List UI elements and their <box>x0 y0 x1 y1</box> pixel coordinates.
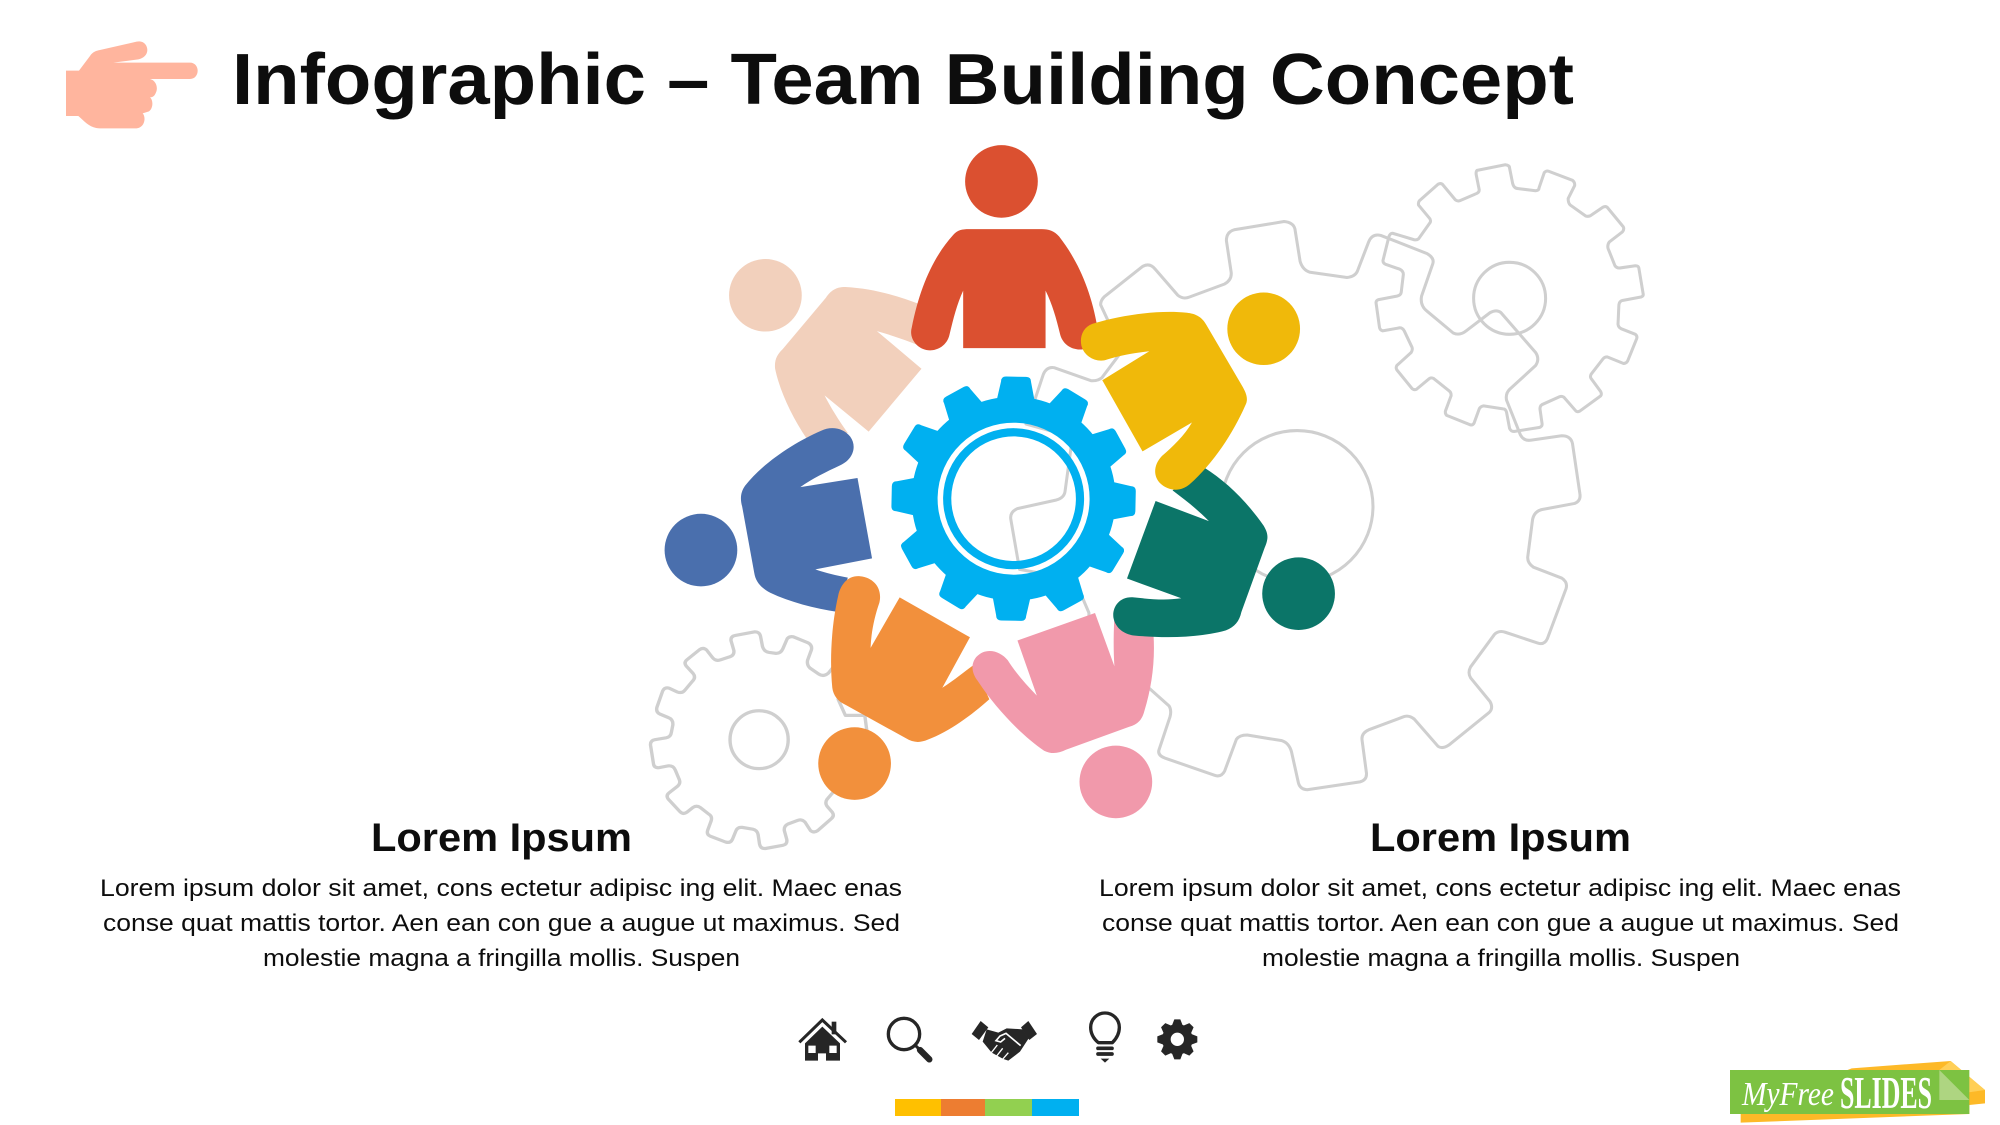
person: blue <box>665 428 872 612</box>
left body text: conse quat mattis tortor. Aen ean con gue a augue ut maximus. Sed <box>103 910 900 937</box>
right body text: molestie magna a fringilla mollis. Suspen <box>1262 945 1740 972</box>
icon: pointing hand <box>66 41 198 128</box>
left body text: molestie magna a fringilla mollis. Suspen <box>263 945 740 972</box>
left body text: Lorem ipsum dolor sit amet, cons ectetur adipisc ing elit. Maec enas <box>100 875 902 902</box>
icon: settings gear <box>1157 1019 1197 1059</box>
right body text <box>1099 875 1901 972</box>
icon: handshake <box>972 1021 1037 1061</box>
right body text: Lorem ipsum dolor sit amet, cons ectetur adipisc ing elit. Maec enas <box>1099 875 1901 902</box>
icon: light bulb <box>1091 1013 1119 1063</box>
right text block <box>1099 816 1901 972</box>
icon: house <box>799 1020 846 1061</box>
left text block <box>100 816 902 972</box>
left body text <box>100 875 902 972</box>
logo: MyFree Slides: MyFree <box>1741 1076 1834 1113</box>
title: Infographic – Team Building Concept <box>232 40 1574 120</box>
right heading: Lorem Ipsum <box>1370 816 1631 860</box>
person: red <box>911 145 1098 350</box>
left heading: Lorem Ipsum <box>371 816 632 860</box>
logo: MyFree Slides: SLIDES <box>1840 1067 1932 1118</box>
icon: magnifier <box>888 1018 929 1059</box>
person: pink <box>973 613 1154 818</box>
central blue gear <box>889 374 1138 623</box>
background gear: top right <box>1376 165 1643 431</box>
team of seven people <box>665 145 1335 818</box>
right body text: conse quat mattis tortor. Aen ean con gue a augue ut maximus. Sed <box>1102 910 1899 937</box>
person: yellow <box>1081 293 1300 490</box>
logo: MyFree Slides <box>1730 1061 1985 1123</box>
person: peach <box>729 259 930 439</box>
background gear: large <box>1011 222 1580 790</box>
person: orange <box>818 576 989 800</box>
background gear: lower left <box>650 632 868 849</box>
icon row <box>799 1013 1197 1063</box>
colour bar <box>895 1099 1079 1116</box>
person: teal <box>1113 467 1335 637</box>
